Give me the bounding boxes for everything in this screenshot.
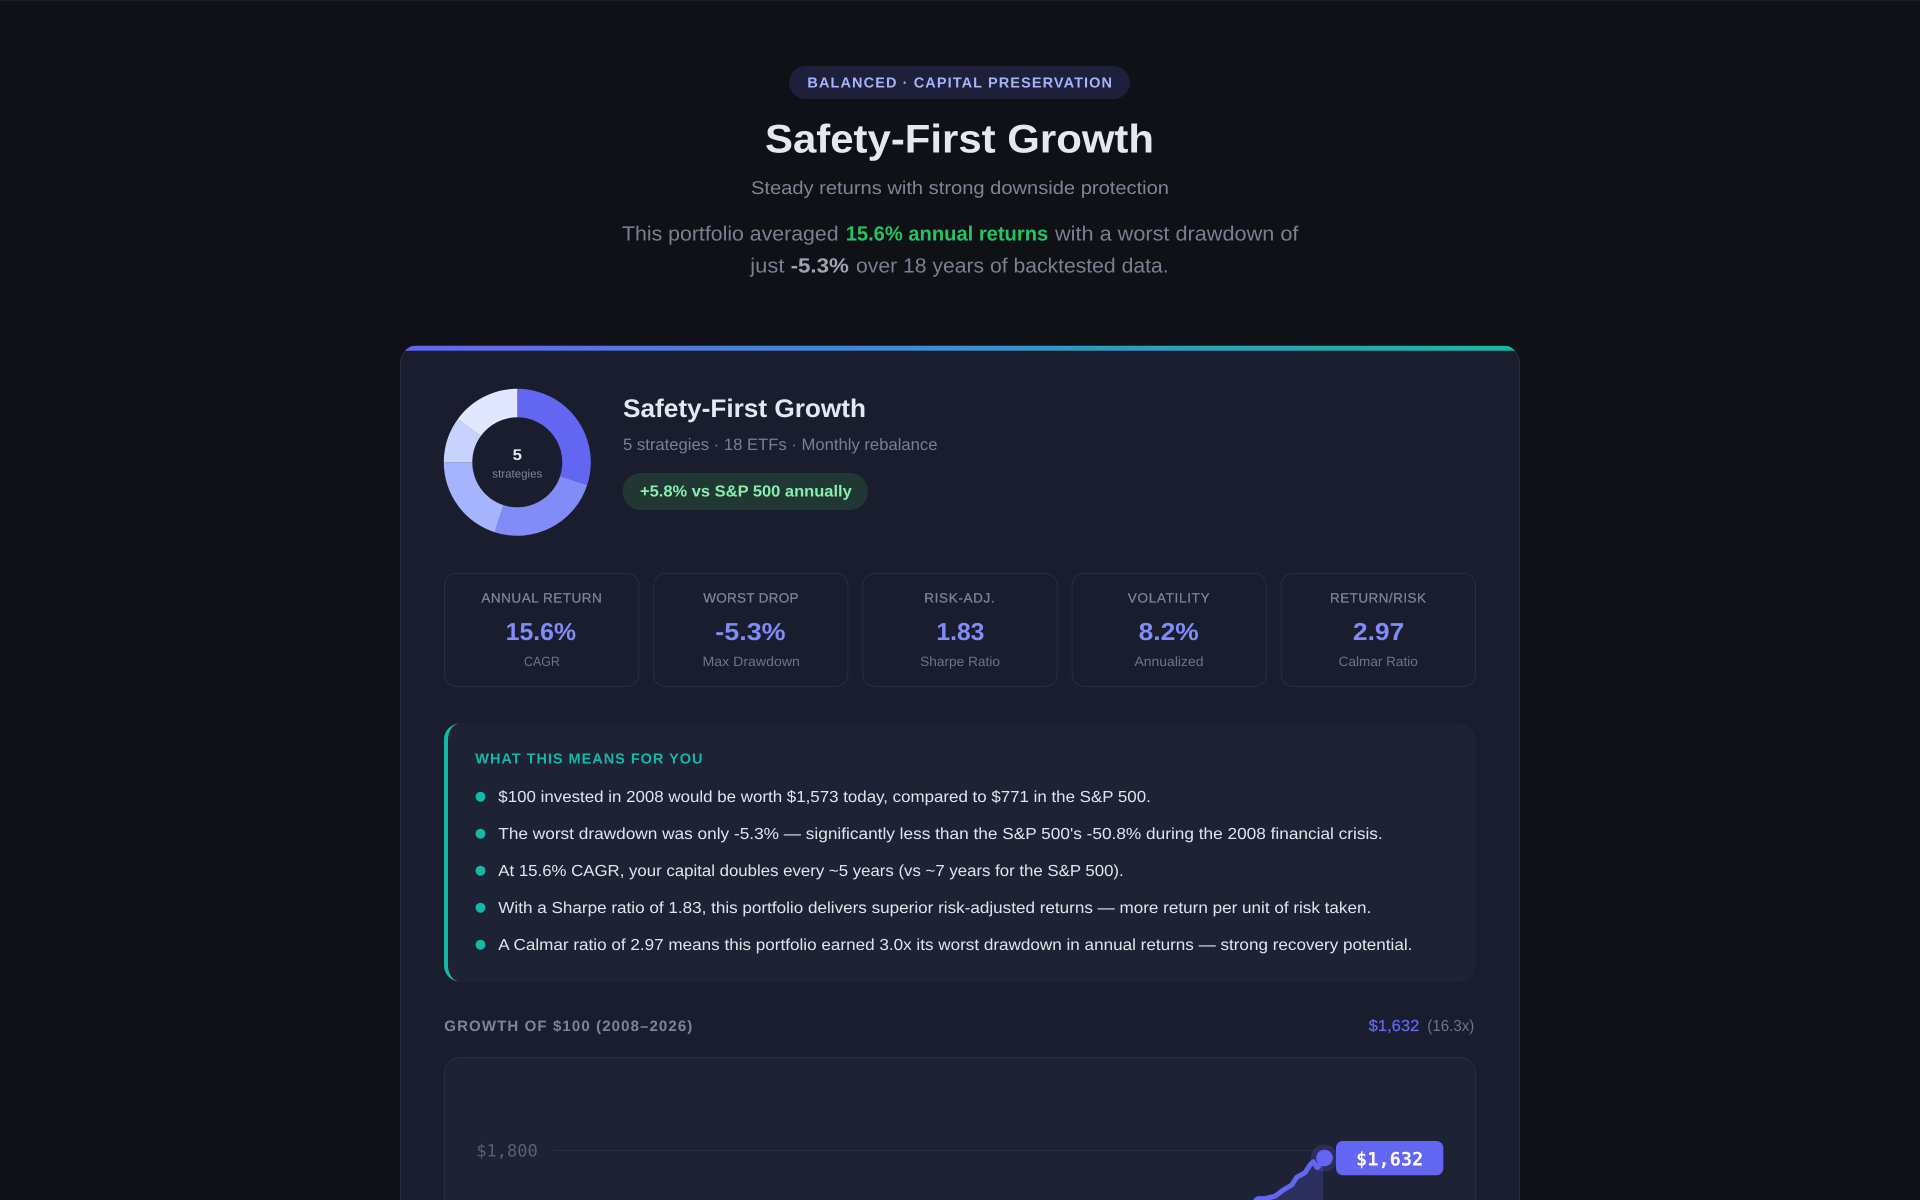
- stat: worst drop: -5.3%: [715, 619, 786, 646]
- portfolio info: [622, 395, 938, 510]
- heading: WHAT THIS MEANS FOR YOU: [475, 751, 702, 767]
- header: [622, 66, 1299, 278]
- stat: risk-adjusted: Sharpe Ratio: [920, 654, 1000, 669]
- growth chart header: $1,632: [1369, 1018, 1419, 1035]
- stat: worst drop: Max Drawdown: [702, 654, 800, 669]
- y-axis label: $1,800: [476, 1142, 538, 1162]
- stat: volatility: VOLATILITY: [1128, 591, 1210, 606]
- stat: risk-adjusted: 1.83: [936, 619, 984, 646]
- panel: what this means for you: [444, 724, 1476, 982]
- stat: return/risk: Calmar Ratio: [1339, 654, 1418, 669]
- bullet 3: At 15.6% CAGR, your capital doubles every ~5 years (vs ~7 years for the S&P 500).: [498, 863, 1124, 880]
- stat: volatility: 8.2%: [1139, 619, 1199, 646]
- bullet 2: The worst drawdown was only -5.3% — significantly less than the S&P 500's -50.8% during the 2008 financial crisis.: [498, 826, 1383, 843]
- stat: volatility: Annualized: [1134, 654, 1204, 669]
- bullet 4: With a Sharpe ratio of 1.83, this portfolio delivers superior risk-adjusted returns — more return per unit of risk taken.: [498, 900, 1371, 917]
- portfolio info: 5 strategies · 18 ETFs · Monthly rebalance: [623, 436, 938, 454]
- stat: annual return: ANNUAL RETURN: [481, 591, 602, 606]
- donut chart: allocation: strategies: [492, 468, 543, 480]
- title: Safety-First Growth: [765, 118, 1154, 162]
- stat: return/risk: [1281, 574, 1476, 686]
- growth chart header: [444, 1018, 1474, 1035]
- end marker: [1311, 1144, 1338, 1172]
- tag pill: BALANCED · CAPITAL PRESERVATION: [807, 75, 1112, 91]
- bullet 1: $100 invested in 2008 would be worth $1,573 today, compared to $771 in the S&P 500.: [498, 789, 1151, 806]
- stat: worst drop: WORST DROP: [703, 591, 798, 606]
- stat: worst drop: [654, 574, 848, 686]
- stat cards: [444, 574, 1476, 686]
- stat: annual return: [444, 574, 639, 686]
- summary text: [622, 223, 1299, 278]
- stat: return/risk: 2.97: [1353, 619, 1404, 646]
- stat: annual return: 15.6%: [506, 619, 576, 646]
- value label: [1336, 1141, 1443, 1175]
- summary text: This portfolio averaged: [622, 223, 839, 246]
- growth line: [1256, 1158, 1325, 1200]
- stat: annual return: CAGR: [524, 654, 560, 669]
- summary text: 15.6% annual returns: [846, 223, 1048, 246]
- portfolio info: Safety-First Growth: [623, 395, 866, 423]
- donut chart: allocation: [444, 389, 591, 536]
- summary text: -5.3%: [791, 255, 849, 278]
- stat: volatility: [1072, 574, 1266, 686]
- growth chart header: GROWTH OF $100 (2008–2026): [444, 1018, 692, 1035]
- stat: risk-adjusted: [863, 574, 1057, 686]
- badge: vs S&P 500: +5.8% vs S&P 500 annually: [640, 484, 852, 501]
- summary text: just: [749, 255, 785, 278]
- badge: vs S&P 500: [622, 473, 868, 510]
- subtitle: Steady returns with strong downside protection: [751, 177, 1169, 198]
- stat: return/risk: RETURN/RISK: [1330, 591, 1426, 606]
- donut chart: allocation: 5: [513, 447, 522, 464]
- summary text: over 18 years of backtested data.: [856, 255, 1169, 278]
- value label: $1,632: [1356, 1150, 1423, 1171]
- panel: portfolio card: [400, 345, 1520, 1200]
- panel: growth chart: [444, 1057, 1476, 1200]
- bullet 5: A Calmar ratio of 2.97 means this portfolio earned 3.0x its worst drawdown in annual returns — strong recovery potential.: [498, 937, 1412, 954]
- tag pill: [789, 66, 1130, 99]
- stat: risk-adjusted: RISK-ADJ.: [924, 591, 995, 606]
- growth chart header: (16.3x): [1427, 1018, 1474, 1035]
- area fill: [1256, 1158, 1323, 1200]
- summary text: with a worst drawdown of: [1054, 223, 1299, 246]
